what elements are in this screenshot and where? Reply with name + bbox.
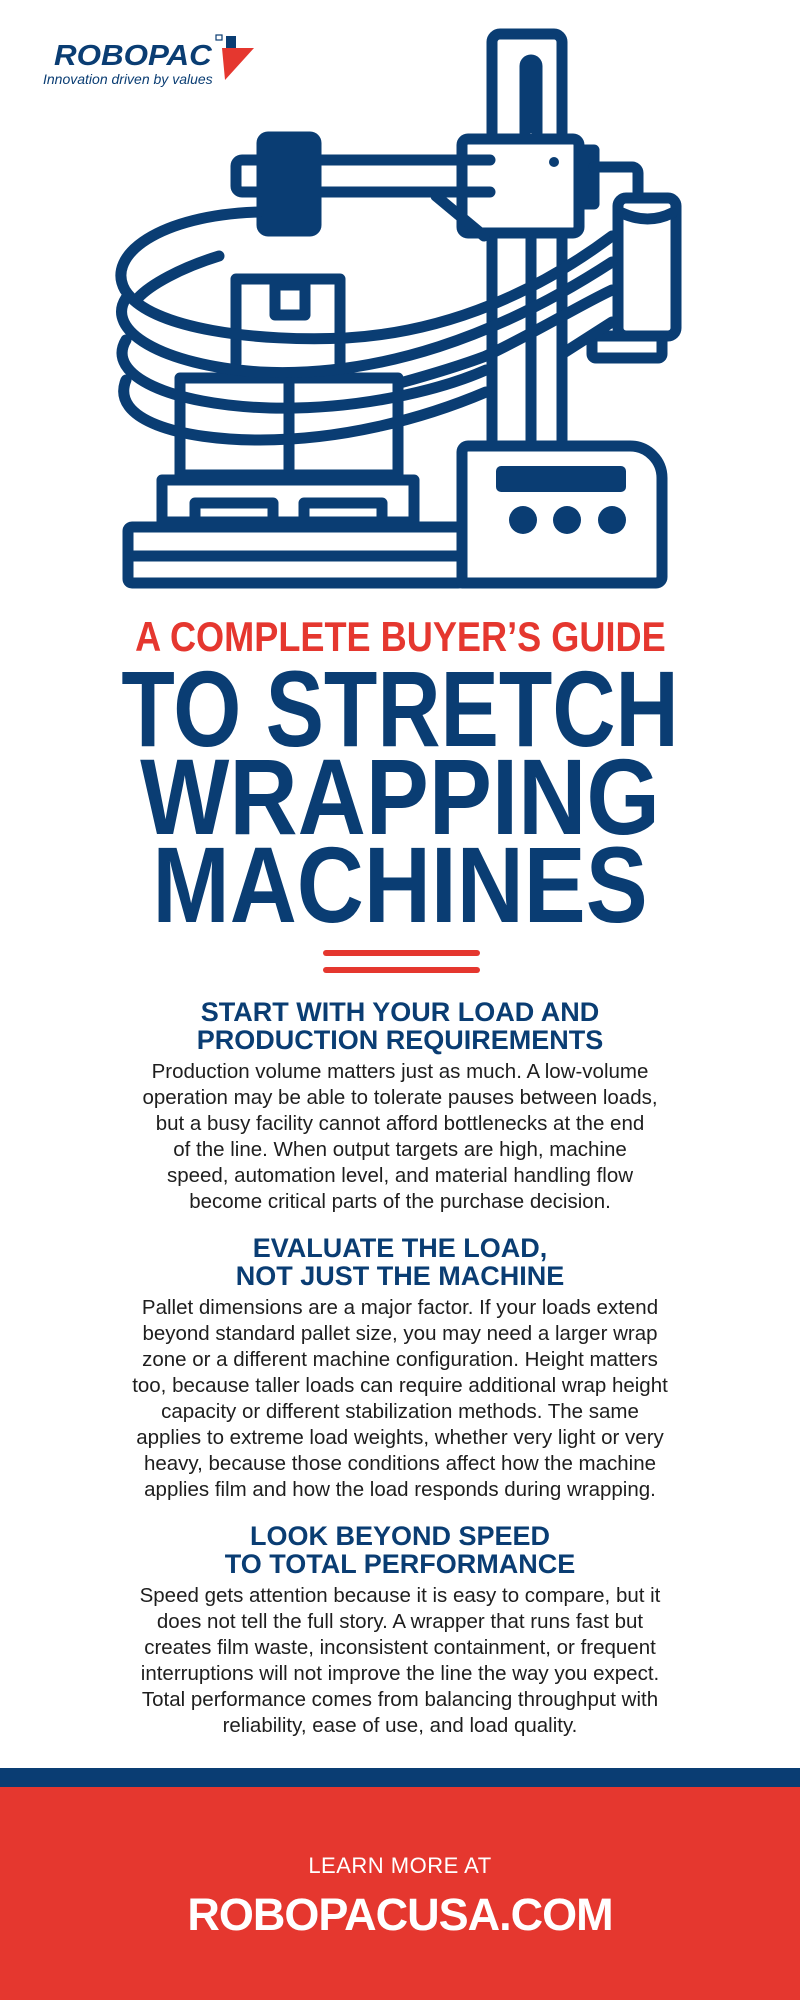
film roll: [618, 198, 676, 336]
footer label: LEARN MORE AT: [308, 1853, 492, 1878]
subtitle: A COMPLETE BUYER’S GUIDE: [135, 613, 665, 660]
text 1: of the line. When output targets are high, machine: [173, 1138, 627, 1161]
control box: [462, 446, 662, 583]
heading 3: [225, 1521, 575, 1579]
text 1: speed, automation level, and material handling flow: [167, 1164, 633, 1187]
text 3: creates film waste, inconsistent containment, or frequent: [144, 1636, 656, 1659]
heading 2: EVALUATE THE LOAD,: [253, 1233, 547, 1263]
text 2: [132, 1296, 668, 1501]
text 1: [142, 1060, 658, 1213]
text 1: operation may be able to tolerate pauses between loads,: [142, 1086, 658, 1109]
text 3: does not tell the full story. A wrapper that runs fast but: [157, 1610, 643, 1633]
heading 3: LOOK BEYOND SPEED: [250, 1521, 550, 1551]
text 3: Speed gets attention because it is easy to compare, but it: [140, 1584, 660, 1607]
heading 1: [197, 997, 603, 1055]
hose to roll: [594, 167, 638, 192]
main title: MACHINES: [152, 824, 648, 945]
text 2: too, because taller loads can require additional wrap height: [132, 1374, 668, 1397]
load stack: [180, 378, 398, 475]
logo wordmark: ROBOPAC: [54, 40, 212, 72]
section 2: [132, 1233, 668, 1501]
logo mark: [215, 34, 254, 80]
heading 1: START WITH YOUR LOAD AND: [201, 997, 599, 1027]
text 2: Pallet dimensions are a major factor. If your loads extend: [142, 1296, 658, 1319]
text 1: Production volume matters just as much. A low-volume: [152, 1060, 648, 1083]
box on top: [236, 279, 340, 363]
base: [128, 527, 462, 583]
heading 2: NOT JUST THE MACHINE: [236, 1261, 564, 1291]
section 1: [142, 997, 658, 1213]
text 2: zone or a different machine configuration. Height matters: [142, 1348, 658, 1371]
mast: [492, 34, 562, 133]
section 3: [140, 1521, 660, 1737]
text 2: capacity or different stabilization methods. The same: [161, 1400, 639, 1423]
main title: WRAPPING: [140, 736, 660, 857]
text 2: applies film and how the load responds during wrapping.: [144, 1478, 656, 1501]
pallet: [162, 480, 414, 522]
text 1: become critical parts of the purchase decision.: [189, 1190, 611, 1213]
text 3: Total performance comes from balancing throughput with: [142, 1688, 658, 1711]
text 3: [140, 1584, 660, 1737]
title underline: [323, 950, 480, 973]
heading 2: [236, 1233, 564, 1291]
text 3: interruptions will not improve the line the way you expect.: [141, 1662, 659, 1685]
text 2: beyond standard pallet size, you may need a larger wrap: [142, 1322, 658, 1345]
heading 3: TO TOTAL PERFORMANCE: [225, 1549, 575, 1579]
arm: [236, 160, 490, 192]
text 1: but a busy facility cannot afford bottlenecks at the end: [156, 1112, 644, 1135]
illustration: stretch wrapping machine: [115, 28, 682, 588]
logo tagline: Innovation driven by values: [43, 71, 213, 87]
main title: TO STRETCH: [121, 648, 679, 769]
text 3: reliability, ease of use, and load quality.: [223, 1714, 577, 1737]
logo: [43, 34, 254, 87]
carriage: [462, 139, 579, 233]
text 2: applies to extreme load weights, whether very light or very: [136, 1426, 664, 1449]
main title: [121, 648, 679, 945]
film bands: [121, 212, 612, 339]
footer url: ROBOPACUSA.COM: [187, 1889, 613, 1940]
heading 1: PRODUCTION REQUIREMENTS: [197, 1025, 603, 1055]
text 2: heavy, because those conditions affect how the machine: [144, 1452, 656, 1475]
footer band: [0, 1768, 800, 2000]
